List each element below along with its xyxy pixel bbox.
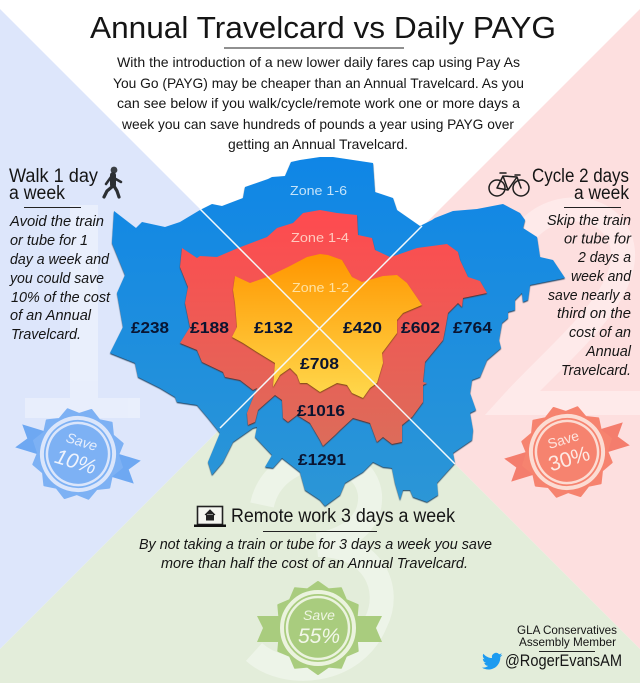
panel: walk [5,166,151,516]
zone labels: Zone 1-4 [291,230,349,245]
zone 1-4 region [180,210,487,446]
remote work heading: Remote work 3 days a week [231,506,455,527]
cycle heading: Cycle 2 days [532,166,629,187]
zone 1-2 region [232,254,422,398]
intro text: You Go (PAYG) may be cheaper than an Annual Travelcard. As you [113,75,524,91]
icon: laptop with house [194,506,226,527]
walk heading [9,166,98,204]
badge: save 10%: Save [64,429,100,454]
panel: remote work [139,506,492,674]
cycle body text [547,212,632,379]
walk body text: of an Annual [10,307,92,324]
background: blue left quadrant [0,9,320,649]
icon: bicycle [489,173,529,196]
credit text: GLA Conservatives [517,623,617,637]
remote work body text: more than half the cost of an Annual Travelcard. [161,555,468,572]
remote work heading underline [263,531,377,532]
intro text: getting an Annual Travelcard. [228,136,408,152]
saving amounts: £602 [401,320,440,337]
saving amounts: £132 [254,320,293,337]
saving amounts: £764 [453,320,492,337]
cycle body text: 2 days a [577,249,631,266]
badge: save 55%: Save [303,607,335,623]
saving amounts: £420 [343,320,382,337]
big faint numeral 2 [512,209,640,403]
saving amounts: £1291 [298,452,346,469]
cycle body text: cost of an [569,324,631,341]
intro text: With the introduction of a new lower daily fares cap using Pay As [117,54,520,70]
big faint numeral 3 [254,459,382,669]
badge: save 30%: Save [546,427,581,452]
cycle heading [532,166,629,204]
saving amounts: £238 [131,320,169,337]
saving amounts [131,320,492,469]
badge: save 30%: 30% [546,442,593,476]
credit block [482,623,622,670]
walk heading: a week [9,183,65,204]
credit text: Assembly Member [519,635,616,649]
twitter handle: @RogerEvansAM [505,651,622,670]
saving amounts: £708 [300,356,339,373]
cycle body text: save nearly a [548,287,631,304]
title underline [224,48,404,49]
zone 1-6 region [110,157,565,506]
walk body text [9,213,111,343]
walk heading: Walk 1 day [9,166,98,187]
cycle body text: or tube for [564,230,632,248]
badge: save 55% [257,582,382,674]
intro text [113,54,524,152]
badge: save 30% [494,390,640,514]
badge: save 55%: 55% [298,625,340,648]
cycle body text: Travelcard. [561,362,631,379]
credit text [517,623,617,649]
cycle body text: third on the [557,305,631,322]
map of London zones [110,157,565,506]
walk body text: 10% of the cost [11,289,111,306]
walk heading underline [24,207,81,208]
intro text: can see below if you walk/cycle/remote work one or more days a [117,95,520,111]
walk body text: Avoid the train [9,213,104,230]
cycle body text: Annual [585,343,632,360]
saving amounts: £188 [190,320,229,337]
saving amounts: £1016 [297,403,345,420]
cycle heading: a week [574,183,629,204]
icon: twitter bird [482,653,502,669]
background: green bottom quadrant [0,329,640,683]
background: red right quadrant [320,9,640,649]
remote work body text: By not taking a train or tube for 3 days a week you save [139,536,492,553]
walk body text: you could save [9,270,104,287]
zone labels: Zone 1-2 [292,280,349,295]
cycle body text: week and [571,268,632,285]
panel: cycle [489,166,640,514]
intro text: week you can save hundreds of pounds a year using PAYG over [121,116,514,132]
credit underline [539,651,595,652]
icon: walking person [104,167,121,197]
walk body text: Travelcard. [11,326,81,343]
walk body text: or tube for 1 [10,232,88,249]
badge: save 10% [5,392,151,516]
remote work body text [139,536,492,572]
zone labels: Zone 1-6 [290,183,347,198]
big faint numeral 1 [25,205,140,418]
walk body text: day a week and [10,251,110,268]
cycle body text: Skip the train [547,212,631,229]
zone labels [290,183,349,295]
badge: save 10%: 10% [52,445,99,479]
cycle heading underline [564,207,621,208]
title: Annual Travelcard vs Daily PAYG [90,10,556,45]
diagonal divider lines [200,209,455,464]
